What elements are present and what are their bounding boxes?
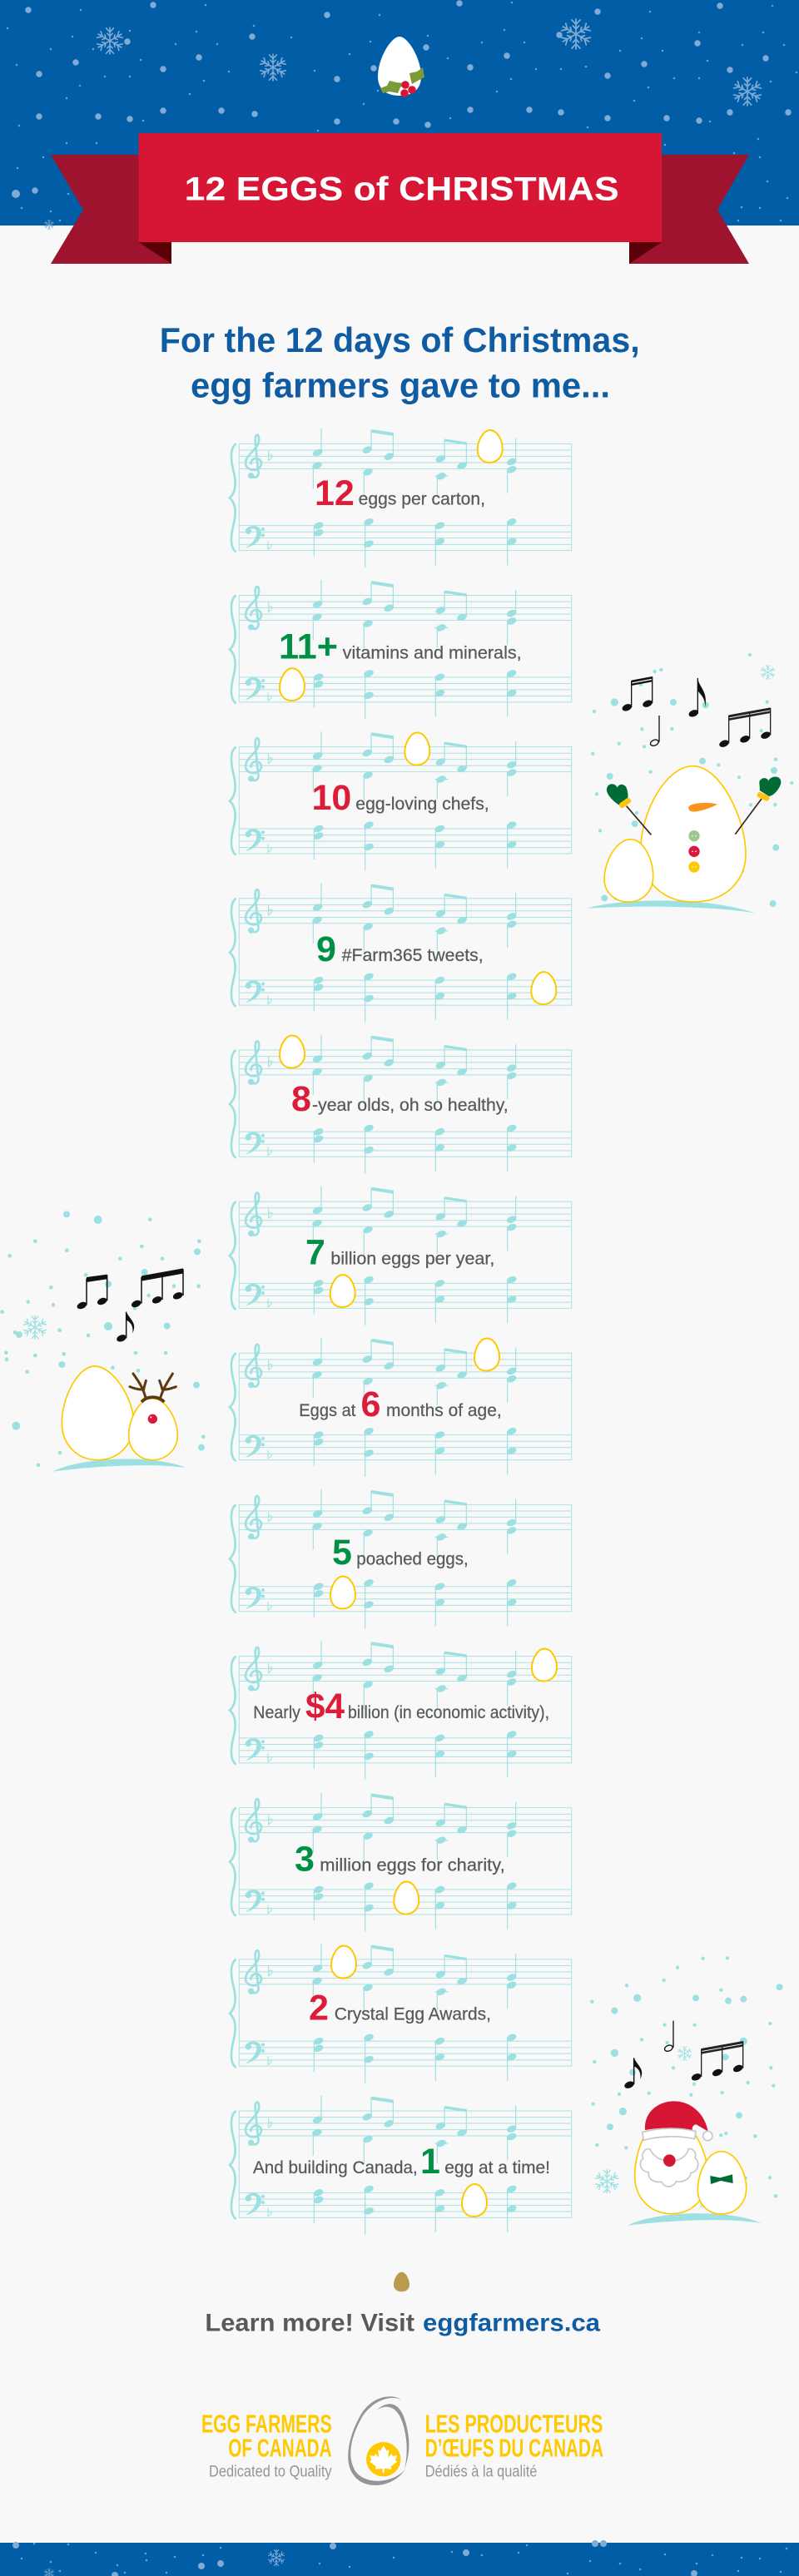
call to action: eggfarmers.ca: [423, 2310, 600, 2337]
row nearly $4 billion: Nearly: [253, 1703, 300, 1722]
row 7 billion eggs per year: [230, 1186, 572, 1325]
logo: egg farmers of canada: EGG FARMERS: [201, 2410, 332, 2438]
logo: egg farmers of canada: Dédiés à la qualité: [425, 2464, 537, 2481]
row and building canada 1 egg: 1: [420, 2142, 440, 2182]
logo: egg farmers of canada: LES PRODUCTEURS: [425, 2410, 603, 2438]
row 5 poached eggs: [230, 1489, 572, 1628]
row 9 Farm365 tweets: 9: [316, 929, 336, 969]
subtitle: For the 12 days of Christmas,: [160, 320, 640, 359]
row nearly $4 billion: $4: [305, 1687, 345, 1726]
icon: gold egg: [394, 2272, 409, 2291]
header snowy band: [0, 0, 799, 230]
logo: egg farmers of canada: OF CANADA: [228, 2434, 332, 2462]
row eggs at 6 months: months of age,: [386, 1401, 502, 1420]
row and building canada 1 egg: egg at a time!: [444, 2158, 550, 2177]
row 10 egg-loving chefs: egg-loving chefs,: [355, 795, 489, 814]
row and building canada 1 egg: [230, 2096, 572, 2235]
row 7 billion eggs per year: billion eggs per year,: [330, 1250, 494, 1269]
ribbon banner: [51, 133, 749, 264]
row 5 poached eggs: poached eggs,: [356, 1549, 469, 1569]
row 10 egg-loving chefs: [230, 731, 572, 870]
row eggs at 6 months: Eggs at: [299, 1401, 355, 1420]
row nearly $4 billion: billion (in economic activity),: [348, 1703, 549, 1722]
row and building canada 1 egg: And building Canada,: [253, 2158, 418, 2177]
logo: egg farmers of canada: D’ŒUFS DU CANADA: [425, 2434, 603, 2462]
logo: egg farmers of canada: Dedicated to Quality: [209, 2464, 332, 2481]
row 11+ vitamins and minerals: vitamins and minerals,: [343, 644, 522, 663]
row 12 eggs per carton: eggs per carton,: [359, 490, 485, 509]
row 11+ vitamins and minerals: [230, 580, 572, 719]
row 8-year olds: [230, 1035, 572, 1174]
call to action: Learn more! Visit: [205, 2310, 414, 2337]
footer snowy band: [0, 2543, 799, 2576]
icon: egg with holly: [378, 37, 424, 97]
row 2 crystal egg awards: Crystal Egg Awards,: [335, 2005, 491, 2024]
row 2 crystal egg awards: [230, 1944, 572, 2083]
row 8-year olds: 8: [291, 1079, 311, 1119]
row 8-year olds: -year olds, oh so healthy,: [312, 1096, 509, 1115]
row 3 million eggs for charity: million eggs for charity,: [320, 1855, 505, 1875]
row nearly $4 billion: [230, 1641, 572, 1780]
row 11+ vitamins and minerals: 11+: [279, 627, 338, 667]
call to action: [205, 2310, 600, 2337]
illustration: santa egg: [592, 1958, 780, 2226]
illustration: egg with reindeer: [2, 1214, 203, 1472]
illustration: singing snowman: [588, 655, 792, 914]
row 3 million eggs for charity: 3: [295, 1839, 315, 1879]
subtitle: [160, 320, 640, 404]
row 12 eggs per carton: [230, 429, 572, 567]
logo: egg farmers of canada: [201, 2396, 603, 2485]
row eggs at 6 months: 6: [361, 1385, 380, 1424]
row 3 million eggs for charity: [230, 1792, 572, 1931]
row 10 egg-loving chefs: 10: [311, 778, 351, 818]
title: 12 EGGS of CHRISTMAS: [185, 171, 619, 208]
row 7 billion eggs per year: 7: [305, 1233, 325, 1273]
row eggs at 6 months: [230, 1338, 572, 1477]
row 12 eggs per carton: 12: [315, 473, 355, 513]
row 5 poached eggs: 5: [332, 1533, 352, 1573]
row 2 crystal egg awards: 2: [309, 1989, 329, 2029]
subtitle: egg farmers gave to me...: [191, 365, 610, 404]
row 9 Farm365 tweets: #Farm365 tweets,: [342, 946, 484, 965]
row 9 Farm365 tweets: [230, 883, 572, 1022]
